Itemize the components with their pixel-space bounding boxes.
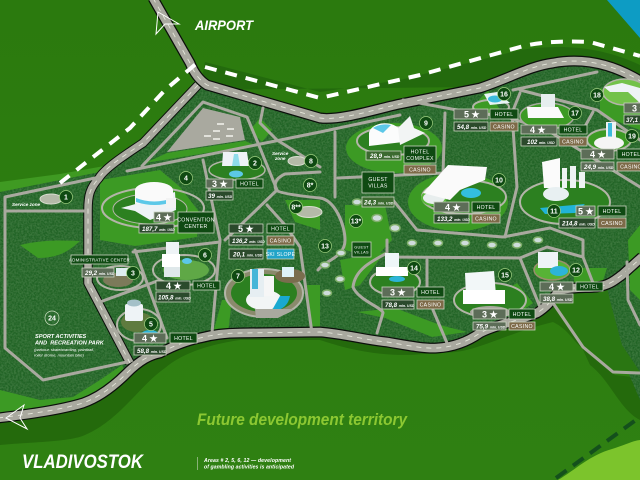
building 11: hotel and casino	[520, 158, 610, 224]
labels: area 4: CENTER	[184, 224, 208, 230]
land: southeast lawn	[553, 289, 640, 372]
labels: guest villas small: VILLAS	[354, 250, 369, 254]
badge 10: 10	[495, 178, 503, 184]
labels: area 4: CONVENTION	[177, 218, 215, 224]
badge 2: 2	[253, 160, 257, 168]
labels: area 7: 20,1 mln. USD	[232, 252, 263, 258]
labels: area 12: 38,8 mln. USD	[543, 296, 573, 303]
building 16: hotel	[473, 92, 510, 114]
badge 16: 16	[500, 92, 508, 98]
building 12: hotel	[534, 252, 570, 280]
text: sport park: (parkour, skateboarding, paintball,	[34, 347, 94, 352]
labels: area 7: CASINO	[270, 238, 291, 244]
water: top right sea	[607, 0, 640, 38]
badge 8*	[304, 178, 316, 192]
labels: guest villas small	[352, 242, 371, 257]
badge 13: 13	[321, 244, 329, 250]
badge 5	[144, 318, 158, 330]
light green shore: bottom right	[558, 440, 640, 480]
labels: area 16: HOTEL	[495, 112, 513, 118]
text: sport park	[34, 334, 105, 358]
buildings: guest villas	[320, 199, 542, 296]
labels: area 9: CASINO	[409, 168, 431, 174]
labels: area 17: 102 mln. USD	[527, 139, 555, 146]
labels: area 5	[134, 333, 197, 355]
building 5: hotel	[117, 300, 161, 341]
labels: area 3: ADMINISTRATIVE CENTER	[69, 257, 130, 262]
labels: area 12: HOTEL	[580, 284, 599, 290]
labels: guest villas: GUEST	[368, 177, 388, 183]
badge 13	[318, 240, 332, 252]
labels: area 6: HOTEL	[197, 284, 216, 290]
building 4: convention center	[102, 182, 204, 228]
labels: area 2: HOTEL	[240, 182, 259, 188]
white dashed boundary	[60, 42, 640, 183]
badge 1: 1	[64, 194, 68, 202]
badge 4	[180, 172, 192, 184]
labels: area 15: CASINO	[511, 324, 533, 330]
badge 11: 11	[550, 208, 558, 216]
badge 1	[60, 190, 72, 204]
labels: area 6: 105,8 mln. USD	[158, 294, 191, 302]
land: forest base	[0, 66, 640, 418]
text: service zone north: zone	[274, 156, 286, 161]
labels: area 15: HOTEL	[513, 312, 531, 318]
building 17: hotel	[520, 94, 574, 129]
badge 12: 12	[572, 268, 580, 274]
labels: area 17	[521, 125, 587, 146]
labels: area 12: 4 ★	[549, 282, 566, 292]
labels: area 3: 29,2 mln. USD	[84, 270, 115, 277]
building 2: hotel	[209, 152, 265, 180]
lawns: light green patches	[0, 88, 640, 416]
labels: area 5: 58,8 mln. USD	[137, 348, 167, 355]
labels: area 17: 4 ★	[530, 125, 547, 135]
labels: area 14: 78,8 mln. USD	[385, 302, 415, 309]
badge 17: 17	[571, 110, 579, 118]
badge 8**: 8**	[291, 204, 301, 212]
labels: area 4: 4 ★	[156, 212, 173, 222]
labels: area 7: SKI SLOPE	[266, 252, 296, 258]
badge 24: 24	[48, 316, 56, 322]
labels: guest villas: 24,3 mln. USD	[363, 200, 394, 206]
badge 13*	[350, 214, 362, 228]
badge 19: 19	[628, 134, 636, 140]
building 7: hotel and ski slope	[225, 267, 305, 318]
building 3: administrative center	[97, 266, 143, 290]
text: sport park: roller drome, mountain bike)	[34, 352, 84, 358]
labels: area 7: HOTEL	[271, 226, 290, 232]
labels: area 6	[156, 281, 220, 302]
badge 8*: 8*	[307, 182, 314, 190]
badge 8**	[290, 200, 302, 214]
badge 18: 18	[593, 92, 601, 100]
labels: area 11: CASINO	[601, 221, 623, 227]
note: gambling areas: of gambling activities is anticipated	[204, 464, 295, 470]
labels: area 3	[69, 255, 130, 277]
building 18: hotel	[603, 79, 640, 105]
labels: area 16	[454, 109, 518, 131]
labels: area 7	[229, 224, 296, 259]
labels: area 14: 3 ★	[390, 288, 407, 298]
land: southeast forest	[607, 255, 640, 400]
labels: area 10	[434, 202, 500, 223]
badge 3: 3	[131, 270, 135, 278]
building 14: hotel	[370, 253, 420, 295]
labels: area 5: HOTEL	[174, 336, 193, 342]
badge 14	[408, 262, 420, 274]
badge 13*: 13*	[351, 218, 362, 226]
labels: area 9: 28,9 mln. USD	[369, 153, 400, 160]
labels: area 19: 24,9 mln. USD	[583, 164, 614, 171]
dark green band along roads	[0, 300, 640, 445]
labels: area 11: 5 ★	[578, 206, 595, 216]
labels: area 18	[624, 103, 640, 124]
labels: area 15: 3 ★	[482, 310, 499, 320]
labels: area 10: 4 ★	[445, 202, 462, 212]
badge 10	[492, 174, 506, 186]
building 6: hotel	[153, 242, 215, 285]
heading: future development territory: Future development territory	[197, 410, 408, 429]
text: sport park: SPORT ACTIVITIES	[35, 334, 87, 340]
text: service zone west: Service zone	[12, 202, 41, 207]
badge 19	[626, 130, 638, 142]
labels: area 5: 4 ★	[142, 334, 159, 344]
labels: area 11: HOTEL	[603, 209, 621, 215]
text: service zone north: Service	[272, 151, 289, 156]
labels: area 7: 136,2 mln. USD	[232, 238, 265, 245]
labels: area 10: CASINO	[475, 216, 497, 222]
labels: area 17: HOTEL	[564, 128, 582, 134]
badge 24	[45, 311, 59, 325]
building: service zones	[40, 156, 322, 218]
badge 16	[498, 88, 510, 100]
building 19: hotel	[587, 122, 631, 151]
badge 5: 5	[149, 322, 153, 328]
parking lot	[167, 108, 245, 152]
labels: area 4	[139, 212, 215, 233]
labels: area 15	[473, 309, 535, 330]
labels: area 9: HOTEL	[411, 150, 429, 156]
labels: area 10: 133,2 mln. USD	[437, 216, 470, 223]
labels: area 7: 5 ★	[238, 224, 255, 234]
labels: area 11: 214,8 mln. USD	[561, 220, 595, 228]
labels: area 17: CASINO	[562, 140, 584, 146]
labels: area 10: HOTEL	[477, 205, 495, 211]
arrow: to Vladivostok	[6, 405, 27, 429]
badge 8	[304, 154, 318, 168]
labels: area 12	[540, 282, 603, 303]
badge 12	[570, 264, 582, 276]
badge 2	[248, 156, 262, 170]
labels: area 2: 3 ★	[212, 179, 229, 189]
badge 6	[198, 248, 212, 262]
badge 18	[590, 88, 604, 102]
badge 11	[548, 204, 560, 218]
labels: area 11	[559, 206, 626, 228]
building 10: hotel	[422, 165, 506, 214]
labels: area 6: 4 ★	[166, 281, 183, 291]
dark green band along upper road	[200, 47, 640, 92]
badge 8: 8	[309, 158, 313, 166]
labels: guest villas	[362, 172, 394, 207]
labels: area 16: 5 ★	[464, 110, 481, 120]
heading: Vladivostok: VLADIVOSTOK	[22, 452, 144, 473]
badge 4: 4	[184, 176, 188, 182]
labels: guest villas small: GUEST	[354, 246, 369, 250]
badge 17	[568, 106, 582, 120]
heading: airport: AIRPORT	[194, 17, 254, 33]
labels: area 19	[581, 149, 640, 171]
building 9: hotel complex	[357, 116, 429, 155]
badge 6: 6	[203, 252, 207, 260]
light green band: west shore	[0, 165, 110, 195]
dashed boundary: dark	[556, 417, 640, 478]
labels: area 14: CASINO	[420, 302, 441, 308]
badge 15: 15	[501, 272, 509, 280]
labels: area 19: HOTEL	[622, 152, 640, 158]
arrow: to airport	[156, 12, 179, 34]
badge 9	[420, 116, 432, 130]
badge 3	[126, 266, 140, 280]
labels: area 14: HOTEL	[421, 290, 440, 296]
labels: area 2	[206, 179, 263, 200]
secondary roads	[5, 72, 640, 380]
labels: guest villas: VILLAS	[368, 184, 388, 190]
labels: area 9	[366, 146, 436, 174]
badge 9: 9	[424, 120, 428, 128]
badge 14: 14	[410, 266, 418, 272]
labels: area 16: CASINO	[493, 124, 515, 130]
note: gambling areas: Areas # 2, 5, 6, 12 — development	[203, 458, 291, 464]
text: service zone north	[272, 151, 289, 161]
labels: area 16: 54,8 mln. USD	[457, 124, 487, 131]
building 15: hotel	[454, 271, 526, 318]
note: gambling areas	[197, 457, 295, 470]
labels: area 19: 4 ★	[590, 150, 607, 160]
labels: area 4: 187,7 mln. USD	[142, 226, 175, 233]
badge 7: 7	[236, 274, 240, 280]
labels: area 9: COMPLEX	[406, 156, 434, 162]
labels: area 14	[382, 287, 444, 309]
labels: area 15: 75,9 mln. USD	[476, 324, 506, 330]
labels: area 2: 39 mln. USD	[208, 193, 233, 200]
badge 7	[232, 270, 244, 282]
text: sport park: AND RECREATION PARK	[34, 340, 105, 346]
badge 15	[498, 268, 512, 282]
